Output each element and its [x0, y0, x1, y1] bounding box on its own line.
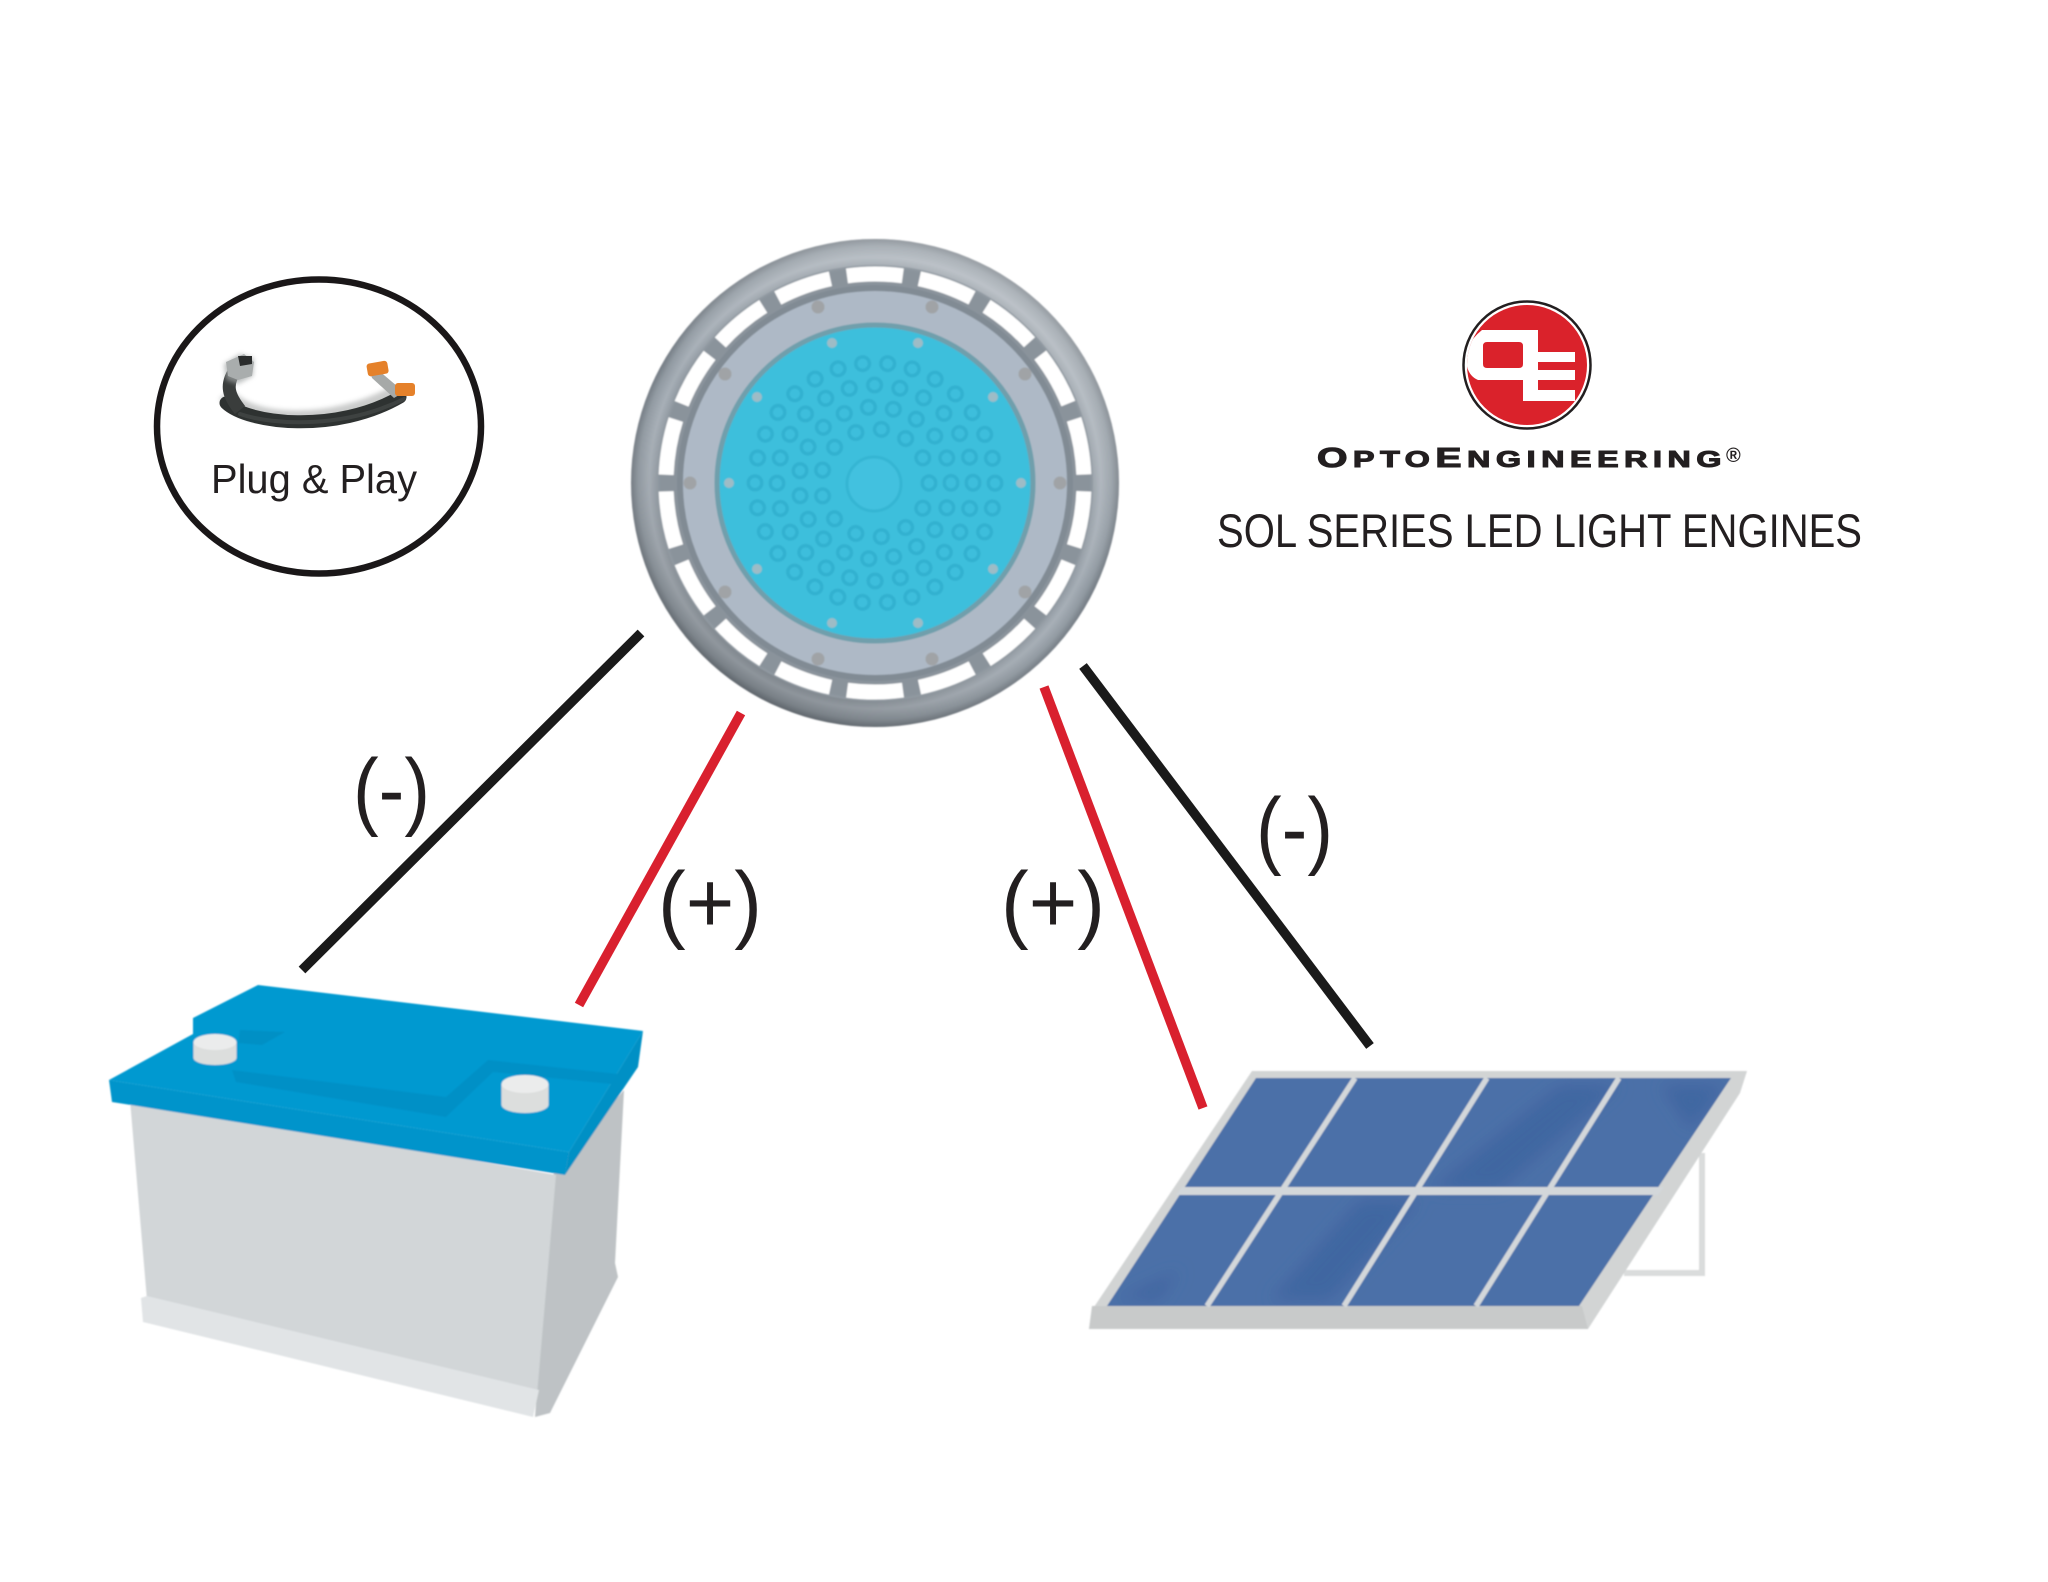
outer bezel [631, 239, 1119, 727]
battery front face [130, 1100, 556, 1395]
stand [1624, 1153, 1702, 1273]
label: battery positive: (+) [658, 855, 762, 951]
badge outline [157, 280, 481, 574]
battery base [141, 1296, 539, 1417]
wordmark: O PTO E NGINEERING [1317, 442, 1727, 473]
label: battery negative: (-) [353, 742, 430, 838]
bezel shading [644, 252, 1106, 714]
plate bolts [684, 300, 1066, 666]
mounting slots [666, 274, 1084, 692]
wire: solar positive [1044, 687, 1203, 1108]
lens screws [724, 338, 1026, 628]
cell dividers [1207, 1078, 1619, 1306]
label: solar positive: (+) [1001, 855, 1105, 951]
label: plug and play: Plug & Play [211, 456, 417, 502]
recessed edge [232, 1060, 618, 1117]
wire: solar negative [1083, 666, 1370, 1046]
wordmark: ® [1726, 445, 1741, 467]
product title: SOL SERIES LED LIGHT ENGINES [1217, 504, 1862, 557]
right terminal [502, 1075, 548, 1113]
panel frame [1089, 1071, 1747, 1329]
panel: plug and play badge [157, 280, 481, 574]
wire: battery negative [302, 633, 641, 970]
icon: wiring harness cable [224, 354, 415, 422]
battery right side [535, 1090, 624, 1417]
LED dot rings [755, 363, 995, 603]
icon: car battery [109, 985, 643, 1417]
solar cells [1107, 1078, 1731, 1306]
lid [109, 985, 643, 1175]
icon: solar panel [1089, 1071, 1747, 1329]
blue LED lens [717, 325, 1033, 641]
label: solar negative: (-) [1256, 781, 1333, 877]
wire: battery positive [579, 713, 741, 1005]
center hub [847, 457, 901, 511]
icon: LED light engine [631, 239, 1119, 727]
panel: OptoEngineering logo [1217, 302, 1862, 557]
left terminal [194, 1034, 236, 1065]
logo badge [1464, 302, 1590, 428]
inner plate [680, 288, 1070, 678]
